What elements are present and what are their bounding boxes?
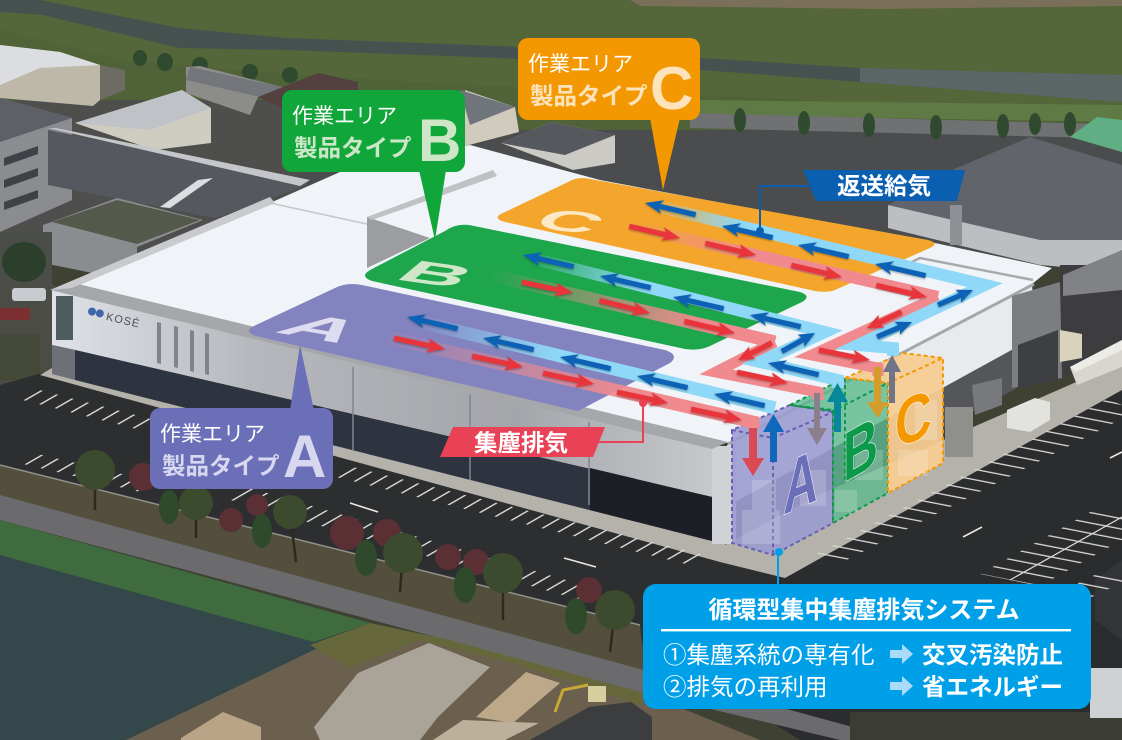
label: floor letter C: C xyxy=(523,202,617,240)
logo: KOSÉ xyxy=(86,306,141,331)
factory building xyxy=(50,145,1122,545)
callout: work area B xyxy=(282,90,465,240)
panel: system summary: 交叉汚染防止 xyxy=(922,642,1063,668)
supply duct C xyxy=(660,207,985,356)
heading: 循環型集中集塵排気システム xyxy=(708,597,1020,624)
equipment box B (dashed) xyxy=(790,378,888,523)
logo: KOSÉ: KOSÉ xyxy=(105,310,141,331)
exhaust duct B xyxy=(490,259,838,400)
equipment box A (dashed) xyxy=(732,405,833,555)
steel structure and outdoor units xyxy=(945,282,1122,457)
equipment box C (dashed) xyxy=(845,353,943,493)
box letter C: C xyxy=(895,374,932,463)
supply duct A xyxy=(420,322,775,408)
callout: work area A: A xyxy=(283,423,326,490)
parking stripes xyxy=(0,388,1122,625)
callout: work area A xyxy=(150,345,333,490)
machinery inside boxes xyxy=(742,400,937,544)
street trees xyxy=(75,450,635,652)
callout: work area B: 作業エリア xyxy=(292,105,397,128)
callout: work area A: 製品タイプ xyxy=(162,453,280,479)
tag: return supply air xyxy=(756,170,965,235)
vertical arrows into machines xyxy=(742,355,901,476)
callout: work area C: 製品タイプ xyxy=(530,83,648,109)
panel: work area B xyxy=(365,225,807,350)
callout: work area C xyxy=(518,38,700,190)
callout: work area B: B xyxy=(418,107,461,174)
callout: work area C: 作業エリア xyxy=(528,53,633,76)
box letter A: A xyxy=(782,432,820,531)
label: floor letter B: B xyxy=(386,254,486,294)
background buildings left xyxy=(0,45,615,385)
label: floor letter A: A xyxy=(263,307,381,349)
blue supply arrows xyxy=(405,196,976,413)
trees beyond parking xyxy=(133,50,1076,139)
ground: parking, road and field xyxy=(0,362,1122,740)
panel: work area C xyxy=(498,178,935,292)
exhaust duct A xyxy=(390,322,775,428)
tag: return supply air: 返送給気 xyxy=(837,173,931,199)
callout: work area C: C xyxy=(650,55,693,122)
red exhaust arrows xyxy=(393,219,929,427)
row 1: ①集塵系統の専有化 xyxy=(663,642,874,668)
tag: dust exhaust xyxy=(440,399,647,457)
callout: work area A: 作業エリア xyxy=(160,423,265,446)
right background building xyxy=(888,117,1122,375)
supply duct B xyxy=(535,259,838,388)
exhaust duct C xyxy=(625,207,985,376)
callout: work area B: 製品タイプ xyxy=(294,135,412,161)
panel: work area A xyxy=(249,284,674,411)
tag: dust exhaust: 集塵排気 xyxy=(474,430,568,456)
row 2: ②排気の再利用 xyxy=(663,674,828,700)
panel: system summary xyxy=(643,548,1091,709)
box letter B: B xyxy=(843,401,878,498)
panel: system summary: 省エネルギー xyxy=(922,674,1063,700)
